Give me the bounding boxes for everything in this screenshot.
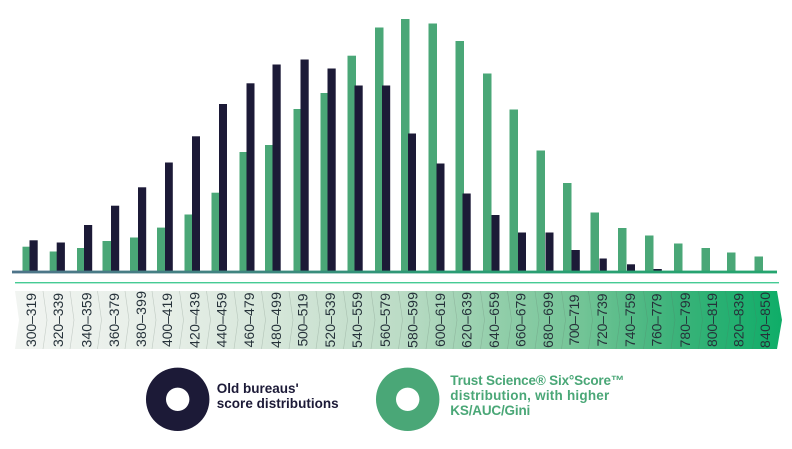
bar chart: dark old bureaus distribution (30, 60, 662, 271)
score range labels: 820–839 (731, 293, 747, 347)
score range labels: 440–459 (214, 292, 230, 348)
legend text: old bureaus (217, 381, 339, 411)
legend: old bureaus (146, 368, 339, 431)
divider line (15, 282, 779, 283)
score range labels: 740–759 (622, 293, 638, 347)
legend text: old bureaus: Old bureaus' (217, 381, 299, 396)
legend text: Trust Science Six°Score: KS/AUC/Gini (450, 403, 530, 418)
score range labels: 300–319 (23, 293, 39, 347)
score range labels: 760–779 (649, 293, 665, 346)
score range labels: 500–519 (295, 293, 311, 346)
legend text: old bureaus: score distributions (217, 396, 339, 411)
score range labels: 320–339 (50, 293, 66, 347)
icon: green ring (376, 368, 439, 431)
legend text: Trust Science Six°Score: distribution, with higher (450, 388, 610, 403)
score range labels: 580–599 (405, 292, 421, 348)
score range labels: 800–819 (704, 293, 720, 347)
chart baseline axis (12, 271, 777, 273)
bar chart: green Six°Score distribution (22, 19, 763, 271)
score range labels: 560–579 (377, 293, 393, 347)
score range labels: 660–679 (513, 293, 529, 347)
score range labels (23, 291, 773, 348)
score range labels: 700–719 (566, 294, 582, 346)
score range labels: 400–419 (159, 293, 175, 347)
score range labels: 600–619 (432, 293, 448, 347)
score range labels: 520–539 (322, 292, 338, 348)
legend text: Trust Science Six°Score (450, 373, 624, 418)
score range labels: 540–559 (349, 292, 365, 348)
score range band (15, 291, 782, 349)
score range labels: 640–659 (486, 292, 502, 348)
score range labels: 840–850 (757, 292, 773, 348)
icon: dark ring (146, 368, 209, 431)
legend text: Trust Science Six°Score: Trust Science® Six°Score™ (450, 373, 624, 388)
band background arrow (15, 291, 782, 349)
score range labels: 620–639 (459, 292, 475, 348)
score range labels: 460–479 (241, 292, 257, 348)
legend: Trust Science Six°Score (376, 368, 624, 431)
score range labels: 380–399 (133, 291, 149, 347)
score range labels: 420–439 (186, 292, 202, 348)
score range labels: 360–379 (106, 293, 122, 347)
score range labels: 780–799 (677, 292, 693, 348)
score range labels: 480–499 (268, 292, 284, 348)
score range labels: 680–699 (540, 292, 556, 348)
score range labels: 340–359 (78, 292, 94, 348)
band chevron separators (43, 291, 756, 349)
score range labels: 720–739 (594, 293, 610, 346)
